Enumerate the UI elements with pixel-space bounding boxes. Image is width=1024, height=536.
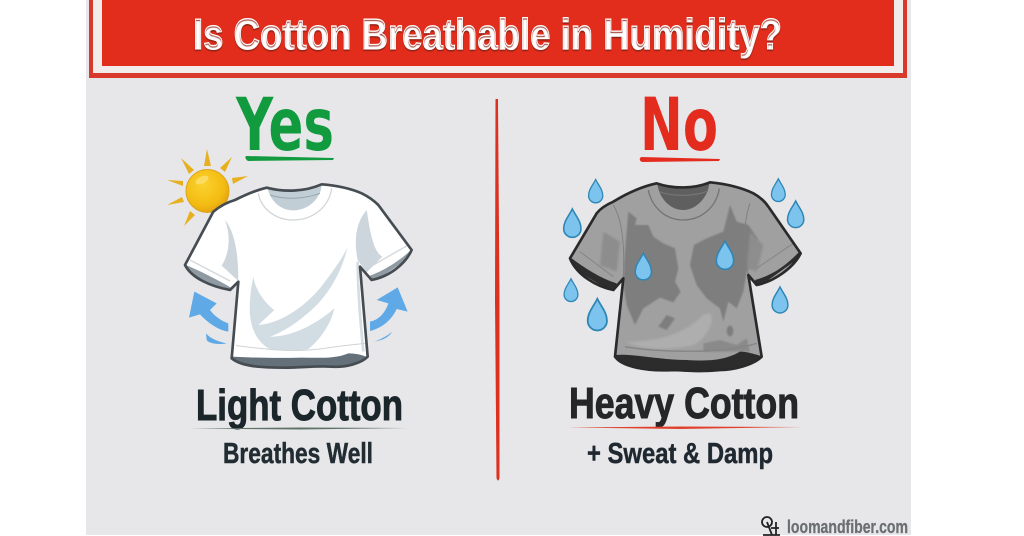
icon: right airflow arrow — [370, 287, 408, 342]
cuffs — [186, 265, 230, 288]
heading: No: No — [640, 83, 718, 168]
watermark — [762, 517, 908, 536]
sleeve shading — [222, 220, 238, 281]
label: Light Cotton: Light Cotton — [196, 381, 403, 430]
hem — [616, 352, 760, 370]
damp patches — [623, 205, 757, 352]
icon: left airflow arrow — [189, 292, 228, 344]
hem — [233, 353, 366, 366]
header banner — [89, 0, 907, 78]
divider: vertical red line — [495, 99, 500, 480]
cuffs — [572, 258, 617, 288]
neck interior — [268, 185, 322, 210]
label: + Sweat & Damp: + Sweat & Damp — [587, 438, 773, 470]
panel: yes — [167, 83, 413, 470]
title: Is Cotton Breathable in Humidity? — [193, 10, 782, 59]
icon: white t-shirt — [182, 184, 413, 372]
icon: water drops — [564, 179, 804, 330]
body shading — [250, 247, 348, 351]
icon: damp gray t-shirt — [564, 179, 804, 373]
heading: Yes: Yes — [235, 83, 334, 168]
label: Breathes Well: Breathes Well — [223, 438, 373, 470]
panel: no — [564, 83, 804, 470]
neck interior — [657, 183, 709, 210]
icon: spinning wheel — [762, 517, 780, 535]
label: Heavy Cotton: Heavy Cotton — [569, 379, 799, 428]
icon: sun — [167, 149, 248, 226]
